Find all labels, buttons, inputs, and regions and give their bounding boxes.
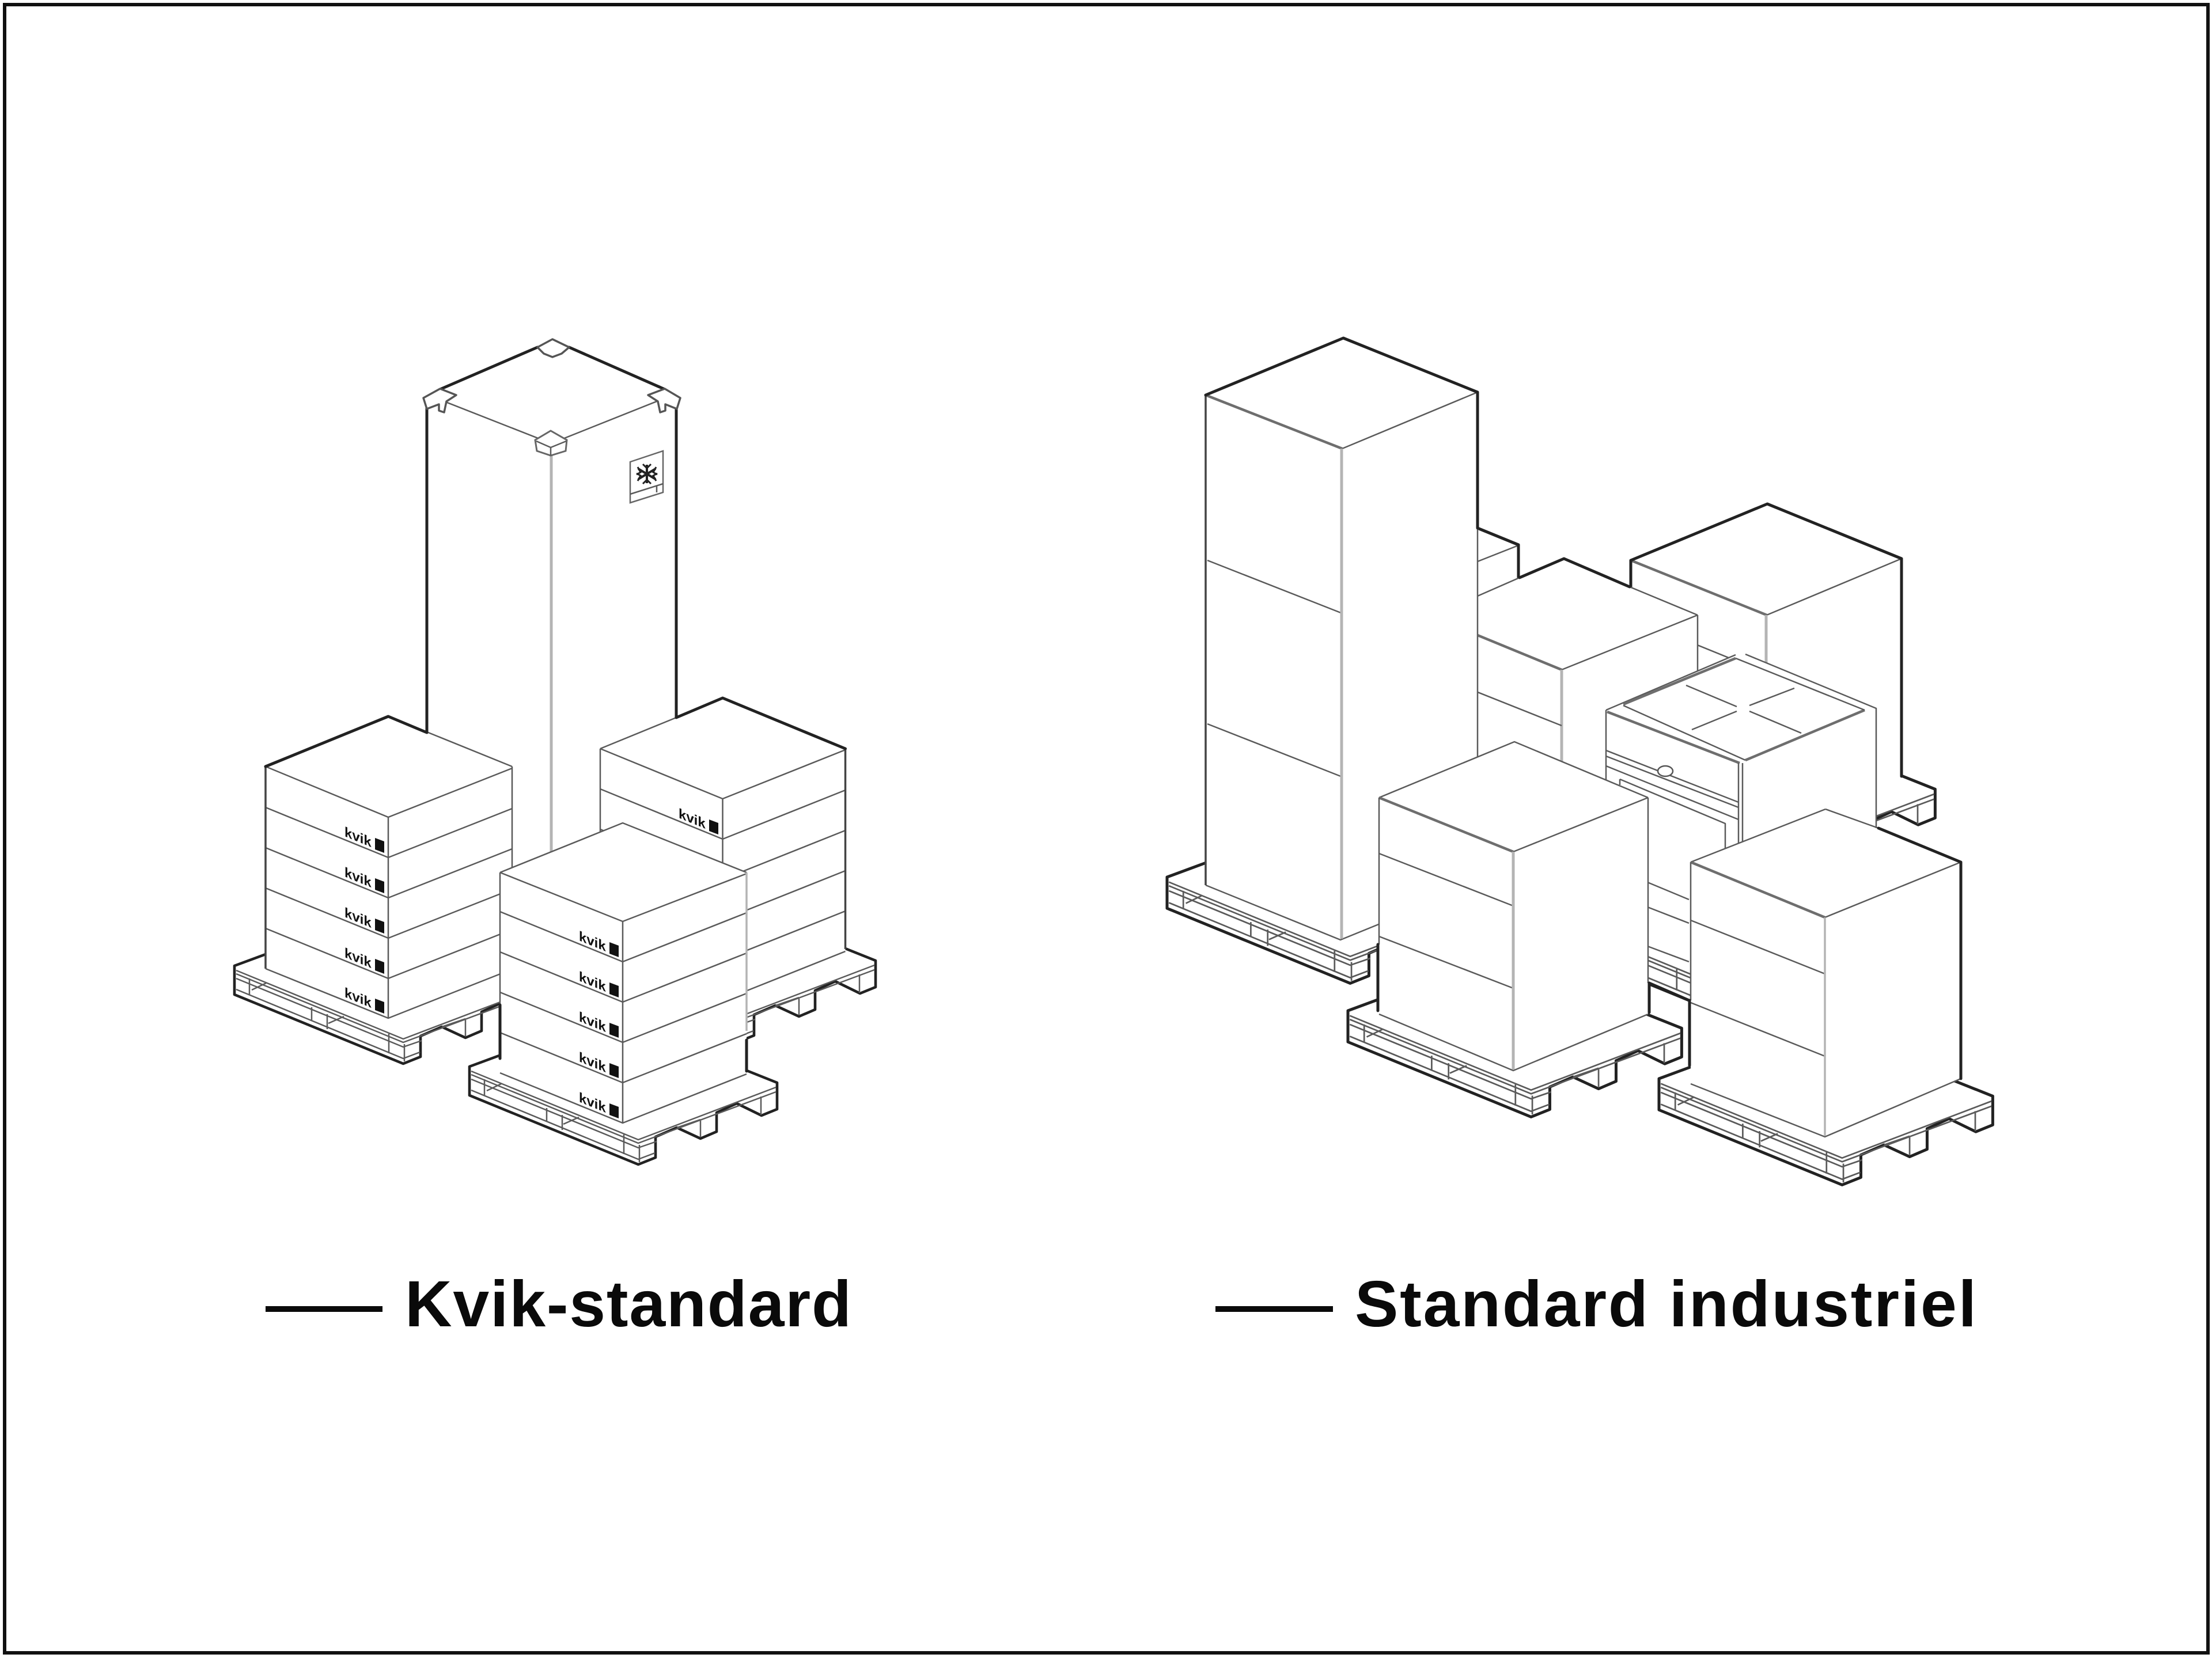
logo: kvik bbox=[344, 864, 384, 893]
corner protector: front bbox=[535, 431, 567, 456]
pallet: tall tower bbox=[1167, 821, 1501, 983]
icon: snowflake label bbox=[630, 451, 663, 503]
logo: kvik: kvik bbox=[579, 1049, 606, 1076]
logo: kvik: kvik bbox=[579, 928, 606, 955]
pallet: back right bbox=[1601, 716, 1935, 878]
logo: kvik: kvik bbox=[679, 806, 706, 832]
logo: kvik bbox=[579, 969, 619, 997]
logo: kvik bbox=[579, 1009, 619, 1038]
small box behind the tower bbox=[1440, 513, 1518, 610]
illustration: Kvik-standard pallets bbox=[234, 339, 876, 1164]
logo: kvik: kvik bbox=[344, 945, 372, 972]
label: Kvik-standard bbox=[405, 1268, 851, 1340]
logo: kvik bbox=[579, 928, 619, 957]
logo: kvik bbox=[579, 1090, 619, 1118]
dash bbox=[266, 1306, 382, 1312]
logo: kvik bbox=[344, 945, 384, 974]
logo: kvik bbox=[579, 1049, 619, 1078]
logo: kvik: kvik bbox=[344, 985, 372, 1011]
logo: kvik: kvik bbox=[579, 1090, 606, 1116]
corner protector: left bbox=[423, 389, 456, 412]
logo: kvik: kvik bbox=[344, 864, 372, 891]
logo: kvik bbox=[344, 824, 384, 853]
corner protector: back bbox=[537, 339, 569, 357]
tall insulated tower with corner protectors bbox=[423, 339, 680, 921]
pallet: under cooker bbox=[1509, 840, 1843, 1001]
box: centre front bbox=[1378, 742, 1649, 1071]
logo: kvik: kvik bbox=[579, 969, 606, 995]
pallet: front stack bbox=[469, 1015, 777, 1164]
cooktop bbox=[1607, 658, 1865, 763]
logo: kvik bbox=[344, 985, 384, 1014]
oven controls and door bbox=[1606, 750, 1738, 848]
cooker bbox=[1606, 654, 1876, 984]
box: back right bbox=[1631, 504, 1902, 835]
caption: Kvik-standard bbox=[266, 1268, 851, 1340]
logo: kvik: kvik bbox=[579, 1009, 606, 1035]
box stack: front bbox=[500, 823, 747, 1123]
logo: kvik bbox=[679, 806, 718, 834]
logo: kvik: kvik bbox=[344, 905, 372, 931]
pallet: back right stack bbox=[568, 893, 876, 1042]
pallet: centre front bbox=[1348, 955, 1681, 1117]
logo: kvik bbox=[344, 905, 384, 934]
caption: Standard industriel bbox=[1215, 1268, 1976, 1340]
dash bbox=[1215, 1306, 1333, 1312]
pallet: left stack bbox=[234, 915, 542, 1064]
box stack: back right bbox=[600, 698, 846, 1000]
logo: kvik: kvik bbox=[344, 824, 372, 851]
box: right front bbox=[1649, 809, 1961, 1137]
label: Standard industriel bbox=[1355, 1268, 1976, 1340]
corner protector: right bbox=[648, 389, 680, 412]
box: middle bbox=[1429, 559, 1698, 835]
pallet: right front bbox=[1659, 1023, 1993, 1185]
tall box tower bbox=[1206, 338, 1478, 940]
illustration: Standard industriel pallets bbox=[1167, 338, 1993, 1185]
box stack: left bbox=[266, 716, 512, 1018]
